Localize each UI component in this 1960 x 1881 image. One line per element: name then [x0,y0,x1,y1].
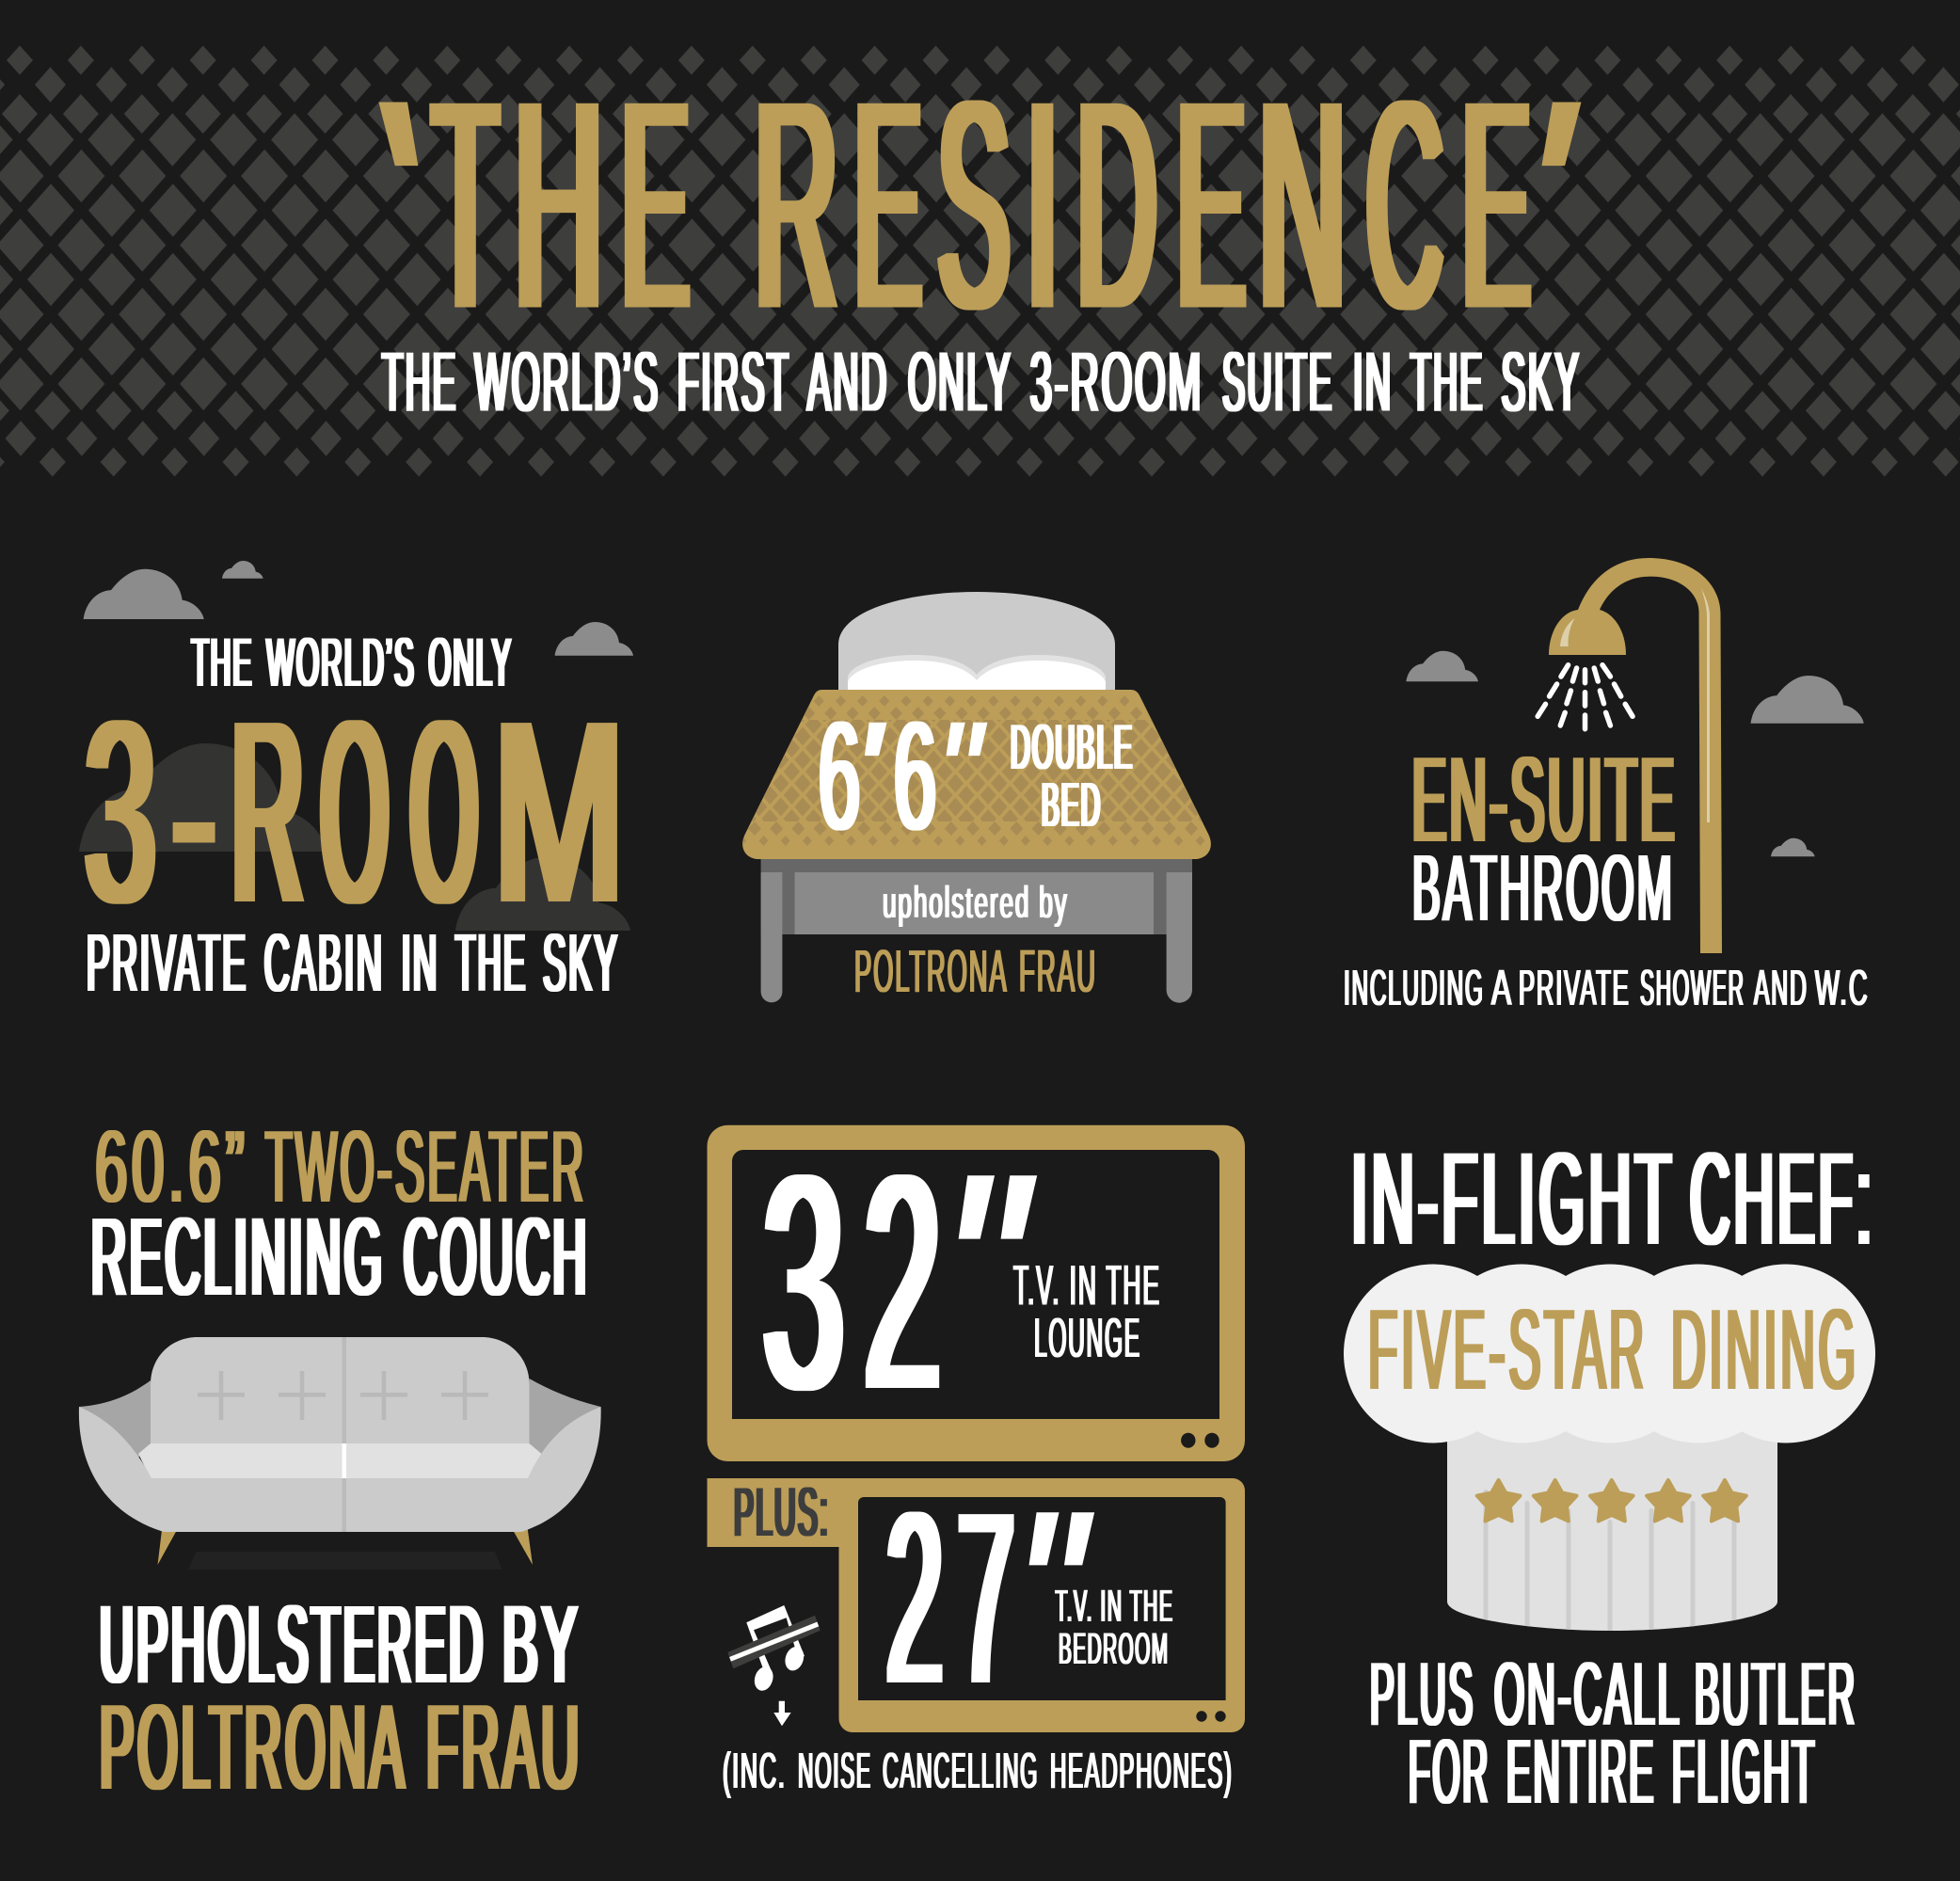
panel: televisions: T.V. IN THE [1056,1582,1174,1632]
icon: music notes with headphones band [727,1605,821,1693]
panel: double bed: DOUBLE [1011,711,1134,783]
panel: reclining couch [79,1109,601,1815]
title: S [938,40,1010,371]
text: for entire flight: FOR [1409,1720,1490,1823]
text: private cabin in the sky: THE [455,917,528,1009]
text: 6'6": 6 [894,690,936,862]
text: including a private shower and w.c: PRIVATE [1519,960,1631,1016]
text: SKY [543,917,620,1009]
heading: 3-room: O [410,667,477,957]
icon: 27 inch tv with plus tab [708,1478,1245,1732]
text: 27" [886,1462,1114,1735]
title: C [1366,40,1442,371]
icon: chef hat [1344,1265,1875,1642]
panel: televisions: BEDROOM [1059,1623,1169,1673]
text: including a private shower and w.c: SHOWER [1640,960,1745,1016]
subtitle: WORLD’S [474,336,661,430]
title: H [515,40,603,371]
text: 27": 7 [958,1462,1014,1735]
subtitle: ONLY [908,336,1012,430]
text: SKY [1502,336,1582,430]
heading: 3-room: R [232,667,303,957]
text: 6'6": " [921,693,1000,843]
subtitle: SUITE [1222,336,1334,430]
text: 27": " [990,1467,1114,1703]
icon: 32 inch tv [708,1125,1245,1461]
panel: televisions: PLUS: [734,1475,830,1551]
text: 6'6": ' [839,693,899,843]
text: for entire flight: ENTIRE [1506,1720,1656,1823]
text: including a private shower and w.c: AND [1754,960,1809,1016]
text: upholstered by: UPHOLSTERED [100,1583,486,1707]
heading: 3-room: 3 [86,667,155,957]
text: private cabin in the sky: CABIN [264,917,385,1009]
text: private cabin in the sky: IN [402,917,439,1009]
subtitle: THE [1410,336,1485,430]
title: E [622,40,689,371]
text: upholstered by: upholstered by [883,877,1069,927]
title: I [1027,40,1058,371]
subtitle: 3-ROOM [1030,336,1203,430]
panel: en-suite bathroom [1344,558,1870,1016]
title: E [1462,40,1530,371]
text: inc. noise cancelling headphones: NOISE [798,1743,872,1799]
text: the world's only: WORLD’S [267,625,416,701]
header diamond pattern band [0,45,1960,476]
title: E [1177,40,1245,371]
text: inc. noise cancelling headphones: CANCELLING [883,1743,1039,1799]
text: TWO-SEATER [265,1109,586,1224]
icon: down arrow [773,1701,791,1726]
panel: reclining couch: BY [502,1583,582,1707]
text: poltrona frau: POLTRONA [100,1680,405,1815]
panel: 3-room cabin [79,561,633,1009]
text: FRAU [426,1680,582,1815]
panel: 3-room cabin: ONLY [429,625,513,701]
icon: sofa [79,1337,601,1570]
text: 32" [763,1111,1060,1453]
text: plus on-call butler: PLUS [1370,1644,1475,1745]
panel: televisions [708,1111,1245,1799]
title: E [855,40,921,371]
heading: 3-room: - [173,667,215,957]
title [356,40,1604,371]
text: including a private shower and w.c: W.C [1815,960,1870,1016]
panel: in-flight chef [1344,1124,1875,1823]
text: 6'6" [819,690,1000,862]
heading: 3-room: O [321,667,388,957]
text: 32": 3 [763,1111,844,1453]
text: 6'6": 6 [819,690,860,862]
title: R [755,40,837,371]
title: ' [356,46,468,331]
icon: clouds [79,561,633,931]
text: inc. noise cancelling headphones: (INC. [723,1743,787,1799]
panel: televisions: T.V. IN THE [1013,1254,1161,1317]
panel: double bed [742,592,1212,1005]
text: t.v. in the lounge [1013,1254,1161,1369]
heading: reclining couch: RECLINING [91,1195,386,1319]
heading: 3-room: M [494,667,625,957]
heading: 60.6" two-seater: 60.6” [95,1109,248,1224]
text: poltrona frau: POLTRONA [854,937,1007,1005]
text: including a private shower and w.c: A [1491,960,1512,1016]
text: double bed: BED [1042,770,1102,840]
icon: shower [1538,558,1722,953]
title: N [1259,40,1346,371]
panel: double bed: FRAU [1019,937,1097,1005]
text: 27": 2 [886,1462,943,1735]
text: HEADPHONES) [1050,1743,1234,1799]
text: plus on-call butler: ON-CALL [1494,1644,1681,1745]
subtitle: THE [382,336,458,430]
text: double bed [1011,711,1134,840]
subtitle: AND [807,336,889,430]
title: D [1077,40,1156,371]
subtitle: FIRST [677,336,790,430]
text: private cabin in the sky: PRIVATE [87,917,248,1009]
text: COUCH [404,1195,589,1319]
icon: clouds [1406,651,1864,856]
title: ' [1492,46,1604,331]
panel: televisions: LOUNGE [1034,1307,1141,1369]
text: 32": 2 [864,1111,941,1453]
text: 32": " [912,1121,1060,1405]
subtitle: IN [1353,336,1394,430]
text: including a private shower and w.c: INCLUDING [1344,960,1485,1016]
text: t.v. in the bedroom [1056,1582,1174,1673]
title: T [433,40,498,371]
icon: bed [742,592,1212,1003]
text: the world's only: THE [192,625,253,701]
